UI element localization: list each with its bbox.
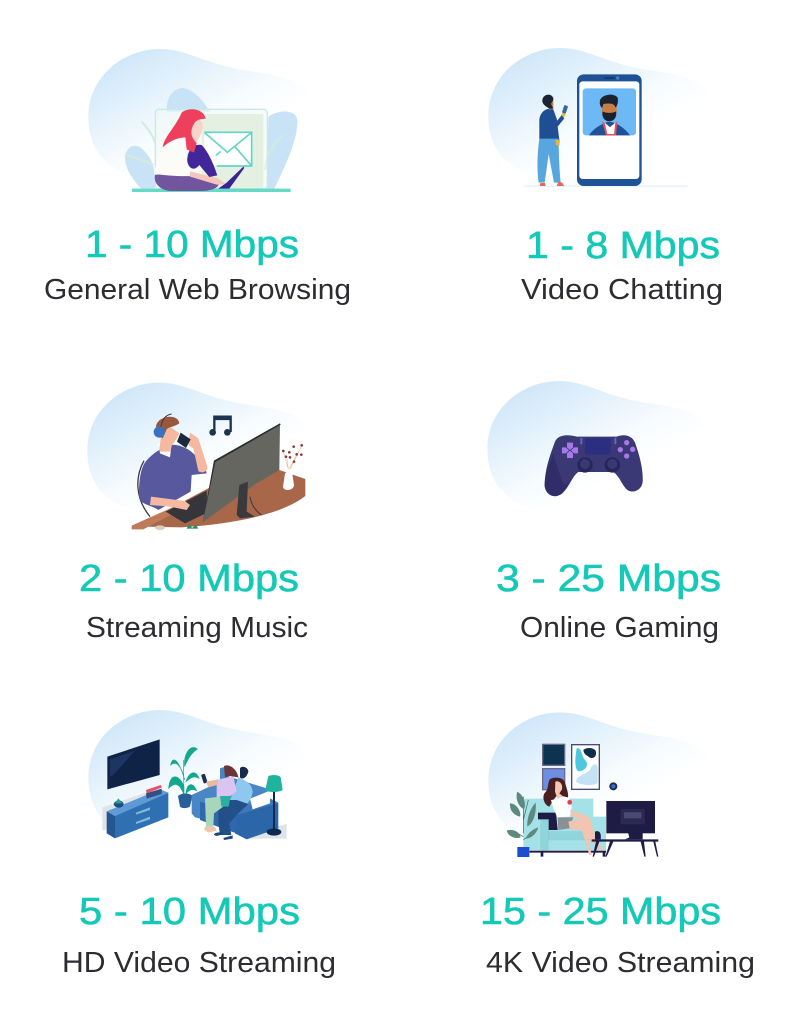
speed: 3 - 25 Mbps: 3 - 25 Mbps — [496, 558, 721, 600]
panel: online gaming — [487, 381, 721, 644]
panel: general web browsing — [44, 49, 351, 306]
panel: 4K video streaming — [480, 712, 755, 979]
label: Video Chatting: Video Chatting — [521, 274, 723, 306]
speed: 1 - 10 Mbps: 1 - 10 Mbps — [85, 224, 299, 266]
illustration: man with headphones at computer — [87, 383, 311, 530]
label: General Web Browsing: General Web Browsing — [44, 274, 351, 306]
speed: 15 - 25 Mbps: 15 - 25 Mbps — [480, 891, 721, 933]
speed: 5 - 10 Mbps: 5 - 10 Mbps — [79, 891, 300, 933]
label: 4K Video Streaming: 4K Video Streaming — [486, 947, 755, 979]
panel: HD video streaming — [62, 710, 336, 979]
illustration: woman on couch watching TV — [488, 712, 712, 857]
illustration: couple on sofa watching TV — [88, 710, 312, 840]
illustration: game controller — [487, 381, 711, 509]
illustration: woman with laptop and email — [88, 49, 312, 192]
speed: 2 - 10 Mbps: 2 - 10 Mbps — [79, 558, 299, 600]
speed: 1 - 8 Mbps: 1 - 8 Mbps — [526, 225, 720, 267]
panel: streaming music — [79, 383, 311, 644]
sofa body — [192, 767, 270, 833]
illustration: man on video call with giant phone — [488, 48, 712, 187]
label: Online Gaming: Online Gaming — [520, 612, 719, 644]
label: Streaming Music: Streaming Music — [86, 612, 308, 644]
label: HD Video Streaming: HD Video Streaming — [62, 947, 336, 979]
icon: music note — [214, 417, 231, 432]
panel: video chatting — [488, 48, 723, 306]
